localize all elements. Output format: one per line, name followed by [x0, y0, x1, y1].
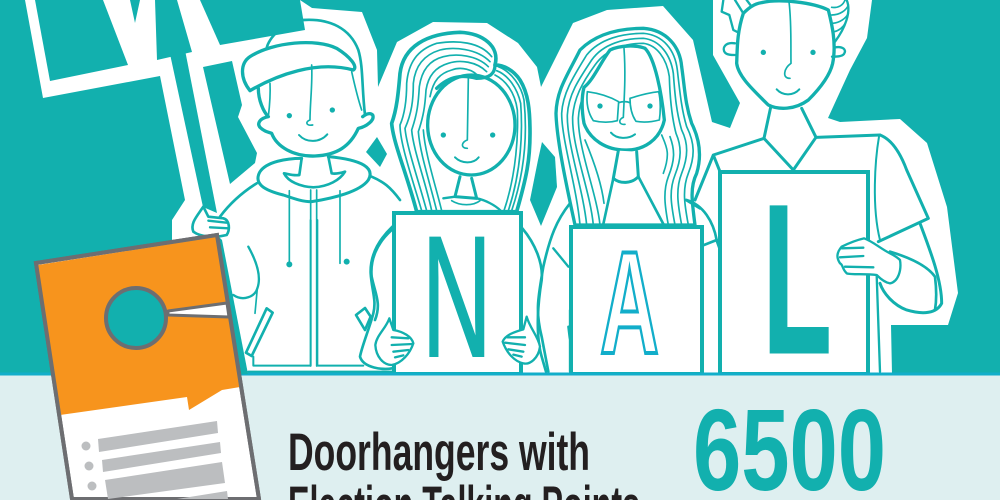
- heading: doorhangers with election talking points: Doorhangers with: [288, 423, 590, 482]
- person 2: woman with long swept hair: [392, 32, 530, 212]
- white paper-cut silhouette of the group: [25, 0, 958, 374]
- hands holding sign N: [375, 317, 540, 365]
- sign with outlined letter A: A: [600, 222, 659, 385]
- teal background: [0, 0, 1000, 374]
- lower body and right arm of person 4: [687, 200, 942, 372]
- hand holding sign L: [837, 238, 900, 283]
- person 1: boy in cap and hoodie: [192, 20, 400, 366]
- arms of person 2 and person 3: [360, 203, 576, 372]
- person 1 arms, pockets and hoodie hem: [233, 220, 393, 372]
- sign with letter N: [394, 201, 521, 393]
- person 3: woman with glasses and wavy hair: [556, 28, 700, 225]
- icon: doorhanger: [36, 235, 259, 499]
- heading: doorhangers with election talking points: [288, 423, 640, 500]
- sign with letter L: [720, 161, 868, 397]
- sign with letter L: L: [763, 161, 831, 397]
- sign with letter N: N: [422, 201, 492, 393]
- person 4: man with short hair: [695, 0, 928, 242]
- pale information band: [0, 374, 1000, 500]
- sign with outlined letter A: [571, 222, 702, 385]
- band top rule: [0, 372, 1000, 376]
